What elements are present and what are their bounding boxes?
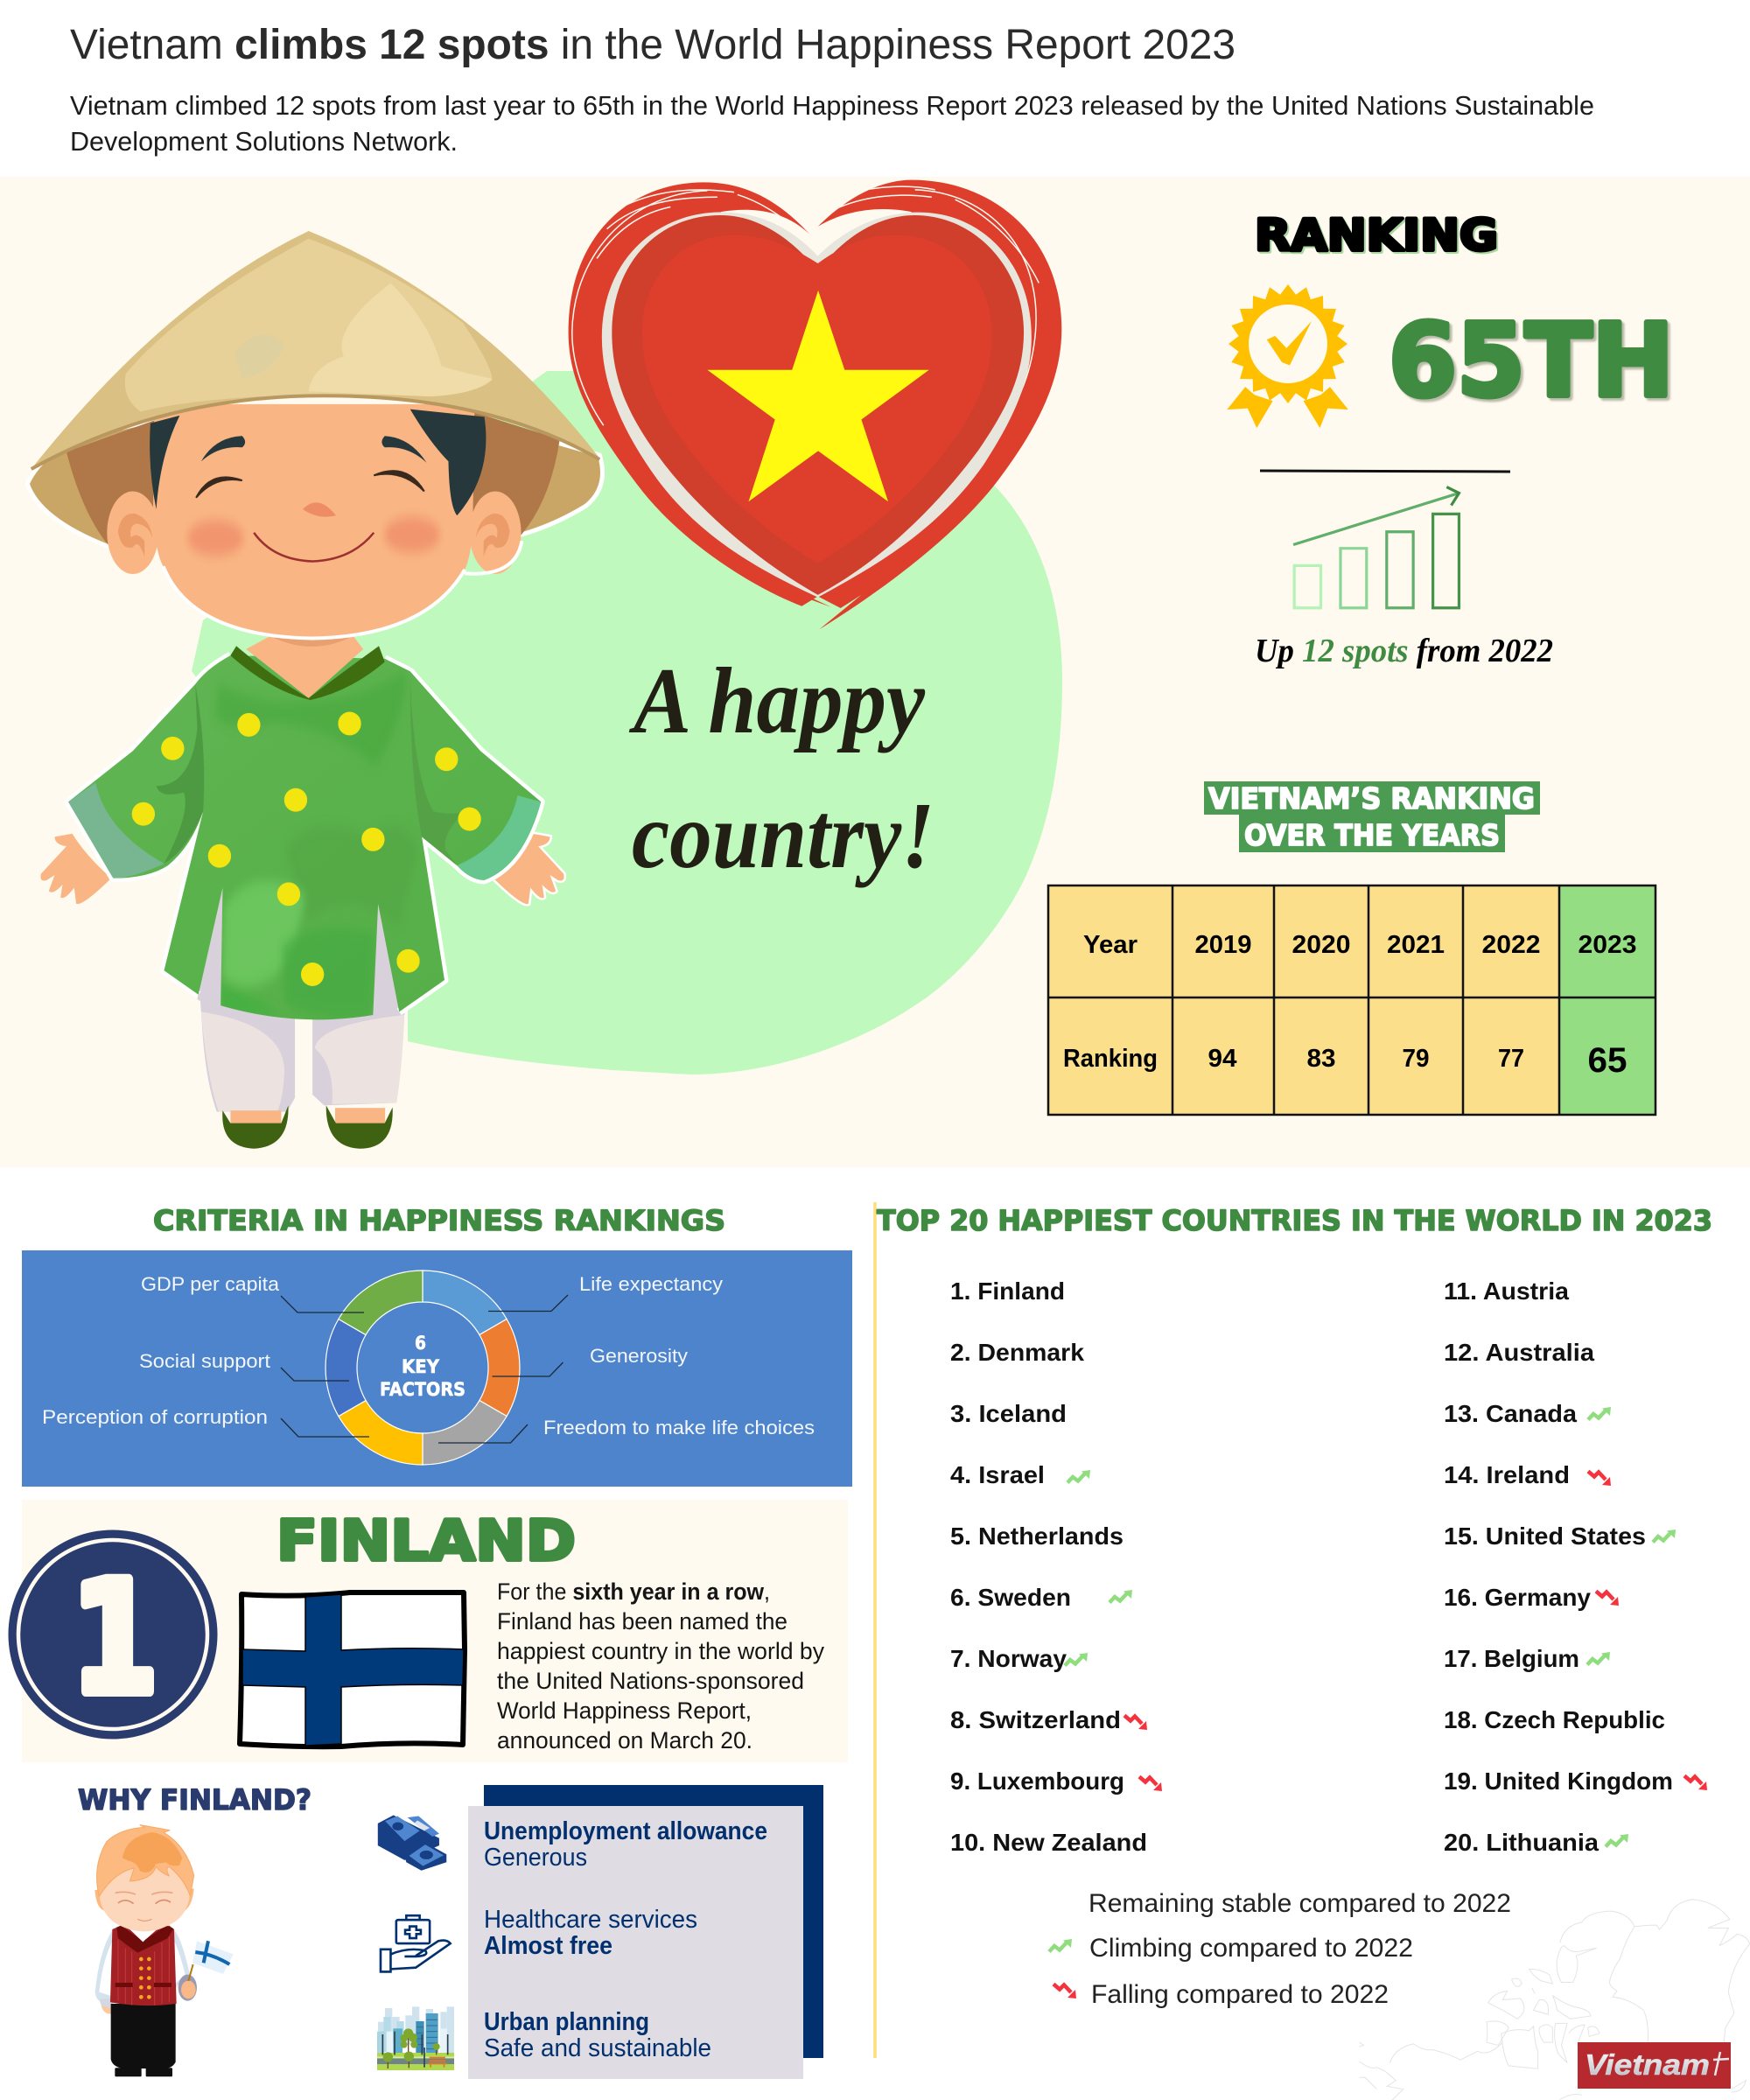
- trees: [383, 2028, 440, 2068]
- reasons text: [484, 1817, 767, 2062]
- shirt white outline: [68, 655, 541, 1012]
- red vest: [110, 1926, 177, 2006]
- cheeks: [187, 517, 440, 556]
- list: ranks 11 to 20: 14. Ireland: [1444, 1461, 1570, 1488]
- lamp posts: [382, 2032, 448, 2068]
- back buildings: [378, 2006, 454, 2056]
- donut labels: Perception of corruption: [42, 1406, 268, 1428]
- shoes: [222, 1105, 393, 1149]
- donut labels: Social support: [139, 1350, 270, 1372]
- legend: Falling compared to 2022: [1091, 1980, 1389, 2009]
- hat top: [32, 231, 599, 469]
- donut labels: [42, 1273, 815, 1438]
- trend arrows: [1065, 1407, 1707, 1846]
- table: ranking by year: 2021: [1387, 931, 1445, 959]
- table: ranking by year: 79: [1402, 1045, 1430, 1073]
- badge: number one: [9, 1530, 217, 1740]
- chart: six factor donut: [326, 1270, 520, 1465]
- panel: why Finland list: [468, 1785, 823, 2079]
- front buildings: [377, 2013, 447, 2054]
- panel: Finland: [22, 1500, 848, 1762]
- Finland description: For the sixth year in a row,: [497, 1578, 770, 1605]
- table: ranking by year: Ranking: [1063, 1045, 1158, 1073]
- donut labels: Life expectancy: [579, 1273, 723, 1295]
- small Finnish flag: [188, 1941, 234, 1981]
- logo: Vietnam+: Vietnam: [1585, 2048, 1710, 2081]
- list: ranks 1 to 10: 3. Iceland: [950, 1400, 1067, 1427]
- trousers: [197, 881, 404, 1112]
- list: ranks 1 to 10: 6. Sweden: [950, 1584, 1071, 1611]
- face features: [196, 436, 426, 561]
- list: ranks 11 to 20: 16. Germany: [1444, 1584, 1591, 1611]
- heart rim: [602, 212, 1032, 598]
- badge: number one: 1: [71, 1549, 158, 1728]
- right hand: [494, 834, 564, 904]
- collar: [230, 646, 385, 700]
- heading: ranking over the years: [1204, 781, 1540, 852]
- list: ranks 1 to 10: 2. Denmark: [950, 1339, 1084, 1366]
- illustration: Vietnamese boy in conical hat: [27, 231, 603, 1149]
- donut centre text: [380, 1333, 466, 1400]
- list: ranks 1 to 10: 5. Netherlands: [950, 1522, 1124, 1550]
- reasons text: Urban planning: [484, 2008, 649, 2036]
- table: ranking by year: 77: [1498, 1045, 1524, 1073]
- donut centre text: KEY: [402, 1356, 440, 1377]
- brush streaks: [572, 186, 1039, 425]
- intro text: Vietnam climbed 12 spots from last year to 65th in the World Happiness Report 2023 released by the United Nations Sustainable: [70, 90, 1594, 121]
- table: ranking by year: 2023: [1578, 931, 1636, 959]
- heading: ranking over the years: OVER THE YEARS: [1244, 818, 1500, 852]
- hat underside: [27, 407, 603, 545]
- donut leader lines: [281, 1295, 568, 1443]
- table: ranking by year: 2020: [1292, 931, 1351, 959]
- list: ranks 11 to 20: 13. Canada: [1444, 1400, 1577, 1427]
- neck: [246, 636, 363, 698]
- table: ranking by year: 2019: [1195, 931, 1251, 959]
- Finland description: happiest country in the world by: [497, 1638, 824, 1664]
- bench: [428, 2057, 447, 2068]
- intro text: Development Solutions Network.: [70, 126, 458, 157]
- heading: why Finland: WHY FINLAND?: [78, 1783, 312, 1816]
- list: ranks 1 to 10: 1. Finland: [950, 1278, 1065, 1305]
- legend: Climbing compared to 2022: [1089, 1934, 1413, 1963]
- list: ranks 1 to 10: 10. New Zealand: [950, 1829, 1147, 1856]
- donut labels: Generosity: [590, 1345, 688, 1367]
- ears: [107, 491, 522, 574]
- shirt front: [130, 1929, 158, 1943]
- chin outline: [164, 566, 465, 638]
- ground and road: [377, 2053, 454, 2070]
- heading: criteria: CRITERIA IN HAPPINESS RANKINGS: [153, 1204, 725, 1237]
- table: ranking by year: 65: [1587, 1041, 1628, 1080]
- heading: ranking over the years: VIETNAM’S RANKING: [1208, 781, 1535, 816]
- slogan: A happy: [628, 649, 926, 753]
- list: ranks 1 to 10: 4. Israel: [950, 1461, 1045, 1488]
- star: [707, 290, 929, 501]
- heart body: [612, 215, 1024, 595]
- table: ranking by year: 83: [1307, 1045, 1335, 1073]
- table: ranking by year: Year: [1083, 931, 1138, 959]
- icon: healthcare hand: [381, 1915, 451, 1971]
- table: ranking by year: 94: [1208, 1045, 1237, 1073]
- reasons text: Generous: [484, 1844, 587, 1872]
- shirt buttons: [132, 712, 481, 986]
- chart: rising bars with arrow: [1293, 487, 1459, 608]
- list: ranks 1 to 10: [950, 1278, 1147, 1856]
- list: ranks 11 to 20: 20. Lithuania: [1444, 1829, 1599, 1856]
- list: ranks 11 to 20: 12. Australia: [1444, 1339, 1594, 1366]
- heading: ranking: RANKING: [1255, 210, 1498, 261]
- logo: Vietnam+: [1578, 2042, 1731, 2089]
- title: Vietnam climbs 12 spots in the World Happiness Report 2023: [70, 22, 1236, 68]
- heading: top 20: TOP 20 HAPPIEST COUNTRIES IN THE WORLD IN 2023: [877, 1204, 1712, 1237]
- left sleeve and hand: [95, 1930, 113, 2014]
- brush streak tip: [758, 580, 831, 607]
- icon: award medal: [1227, 284, 1348, 428]
- list: ranks 1 to 10: 7. Norway: [950, 1645, 1067, 1672]
- heart centre: [642, 234, 992, 563]
- ranking value: 65TH: [1389, 303, 1674, 420]
- panel: six key factors: [22, 1250, 852, 1487]
- watermark: faint map: [1359, 1900, 1749, 2100]
- list: ranks 11 to 20: 11. Austria: [1444, 1278, 1569, 1305]
- icon: money: [378, 1815, 446, 1871]
- heading: Finland: FINLAND: [276, 1509, 576, 1574]
- head: [153, 404, 474, 638]
- brush heart outer: [569, 180, 1061, 629]
- table: ranking by year: 2022: [1482, 931, 1540, 959]
- donut labels: GDP per capita: [141, 1273, 280, 1295]
- legend: Remaining stable compared to 2022: [1088, 1889, 1511, 1918]
- caption: up 12 spots: Up 12 spots from 2022: [1255, 633, 1553, 669]
- right sleeve and hand: [173, 1929, 197, 2001]
- reasons text: Safe and sustainable: [484, 2034, 711, 2062]
- reasons text: Unemployment allowance: [484, 1817, 767, 1845]
- head and hair: [94, 1825, 194, 1931]
- green blob background: [192, 371, 1062, 1074]
- reasons text: Healthcare services: [484, 1906, 697, 1934]
- trousers and boots: [111, 2004, 176, 2076]
- reasons text: Almost free: [484, 1932, 612, 1960]
- Finland description: [497, 1578, 824, 1754]
- Finland description: World Happiness Report,: [497, 1698, 752, 1724]
- left hand: [40, 834, 111, 904]
- table: ranking by year: [1048, 886, 1656, 1115]
- divider: [873, 1202, 877, 2058]
- list: ranks 11 to 20: [1444, 1278, 1673, 1856]
- list: ranks 11 to 20: 15. United States: [1444, 1522, 1646, 1550]
- icon: Vietnam heart flag: [569, 180, 1061, 629]
- panel: Vietnam ranking hero: [0, 177, 1750, 1167]
- Finland description: announced on March 20.: [497, 1727, 752, 1754]
- list: ranks 11 to 20: 19. United Kingdom: [1444, 1768, 1673, 1795]
- donut centre text: FACTORS: [380, 1379, 466, 1400]
- intro text: [70, 90, 1594, 157]
- list: ranks 11 to 20: 17. Belgium: [1444, 1645, 1579, 1672]
- icon: city: [377, 2006, 454, 2070]
- illustration: Finnish boy with flag: [94, 1825, 234, 2076]
- slogan: [628, 649, 934, 888]
- donut labels: Freedom to make life choices: [543, 1417, 815, 1438]
- donut centre text: 6: [415, 1333, 426, 1354]
- green ao dai shirt: [68, 655, 541, 1019]
- list: ranks 1 to 10: 9. Luxembourg: [950, 1768, 1124, 1795]
- slogan: country!: [632, 784, 934, 888]
- Finland description: Finland has been named the: [497, 1608, 788, 1634]
- list: ranks 1 to 10: 8. Switzerland: [950, 1706, 1121, 1733]
- list: ranks 11 to 20: 18. Czech Republic: [1444, 1706, 1665, 1733]
- Finland description: the United Nations-sponsored: [497, 1668, 804, 1694]
- legend: [1049, 1889, 1511, 2009]
- icon: Finnish flag: [240, 1592, 465, 1746]
- hair: [150, 410, 486, 515]
